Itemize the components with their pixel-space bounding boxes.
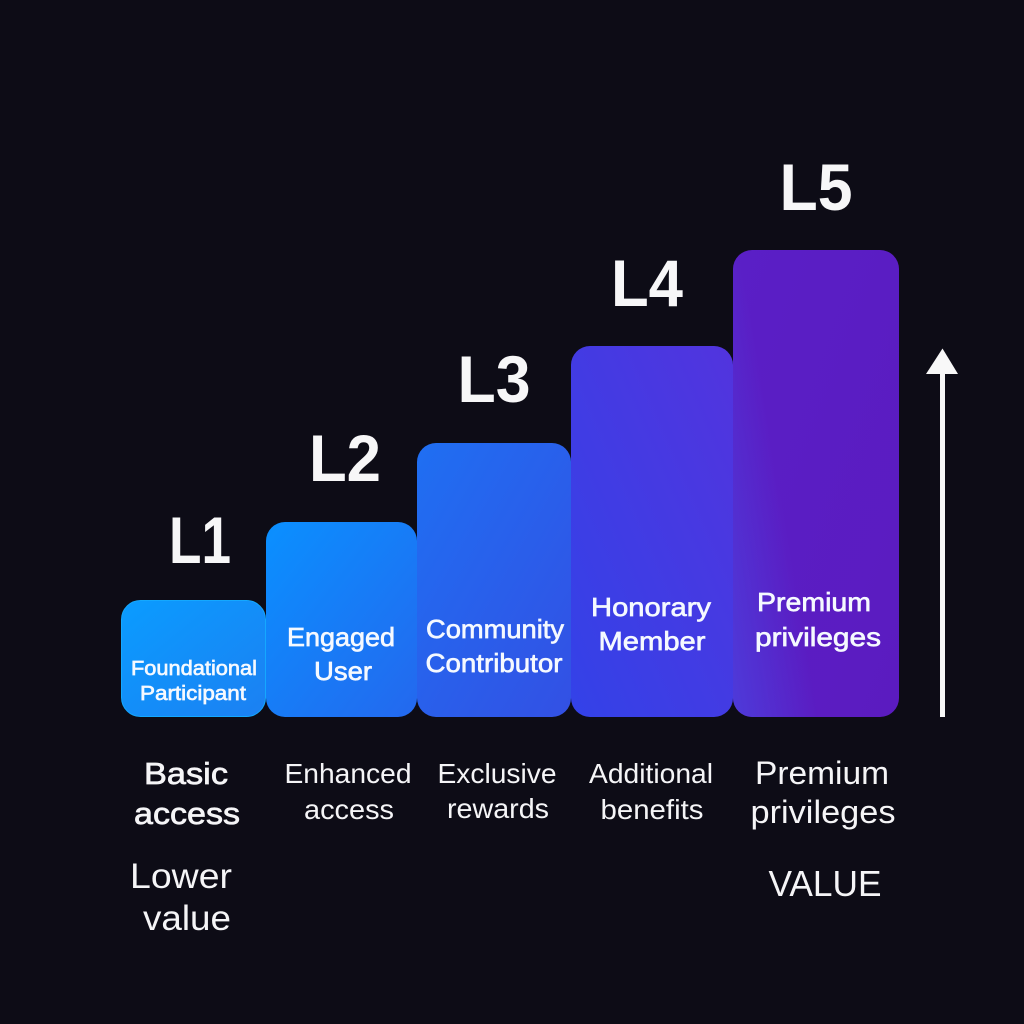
- step L1: Foundational Participant: [122, 600, 266, 716]
- axis label: Lower value: value: [143, 899, 231, 938]
- axis label: VALUE: VALUE: [768, 863, 882, 904]
- benefit: Enhanced access: access: [304, 794, 394, 825]
- step L4: Honorary Member: Honorary: [591, 592, 711, 622]
- axis label: Lower value: Lower: [130, 857, 232, 896]
- benefit: Additional benefits: benefits: [600, 794, 704, 825]
- benefit: Additional benefits: Additional: [589, 758, 713, 789]
- step L1: Foundational Participant: Foundational: [131, 658, 257, 680]
- step L5: Premium privileges: privileges: [755, 622, 881, 652]
- benefit: Exclusive rewards: Exclusive: [438, 758, 556, 789]
- level label L1: L1: [169, 503, 231, 577]
- axis label: Lower value: [130, 857, 232, 938]
- step L4: Honorary Member: Member: [598, 626, 706, 656]
- level label L4: L4: [611, 246, 683, 320]
- benefit: Enhanced access: [284, 758, 412, 825]
- step L4: Honorary Member: [571, 346, 733, 717]
- step L2: Engaged User: [266, 522, 417, 717]
- step L3: Community Contributor: Contributor: [426, 648, 563, 678]
- step L2: Engaged User: Engaged: [287, 622, 395, 652]
- step L5: Premium privileges: [733, 250, 899, 717]
- step L3: Community Contributor: [417, 443, 571, 717]
- step L5: Premium privileges: Premium: [757, 587, 871, 617]
- benefit: Exclusive rewards: [438, 758, 556, 824]
- benefit: Premium privileges: [750, 755, 896, 830]
- benefit: Premium privileges: privileges: [750, 794, 896, 830]
- step L2: Engaged User: User: [314, 656, 372, 686]
- level label L5: L5: [780, 150, 852, 224]
- step L3: Community Contributor: Community: [426, 614, 564, 644]
- benefit: Basic access: access: [134, 796, 240, 831]
- benefit: Enhanced access: Enhanced: [284, 758, 412, 789]
- step L1: Foundational Participant: Participant: [140, 683, 246, 705]
- level label L2: L2: [309, 421, 381, 495]
- benefit: Exclusive rewards: rewards: [447, 793, 549, 824]
- benefit: Premium privileges: Premium: [755, 755, 889, 791]
- benefit: Basic access: [134, 756, 240, 831]
- arrow: value increases upward: [926, 348, 958, 717]
- benefit: Basic access: Basic: [144, 756, 228, 791]
- benefit: Additional benefits: [589, 758, 713, 825]
- level label L3: L3: [458, 342, 530, 416]
